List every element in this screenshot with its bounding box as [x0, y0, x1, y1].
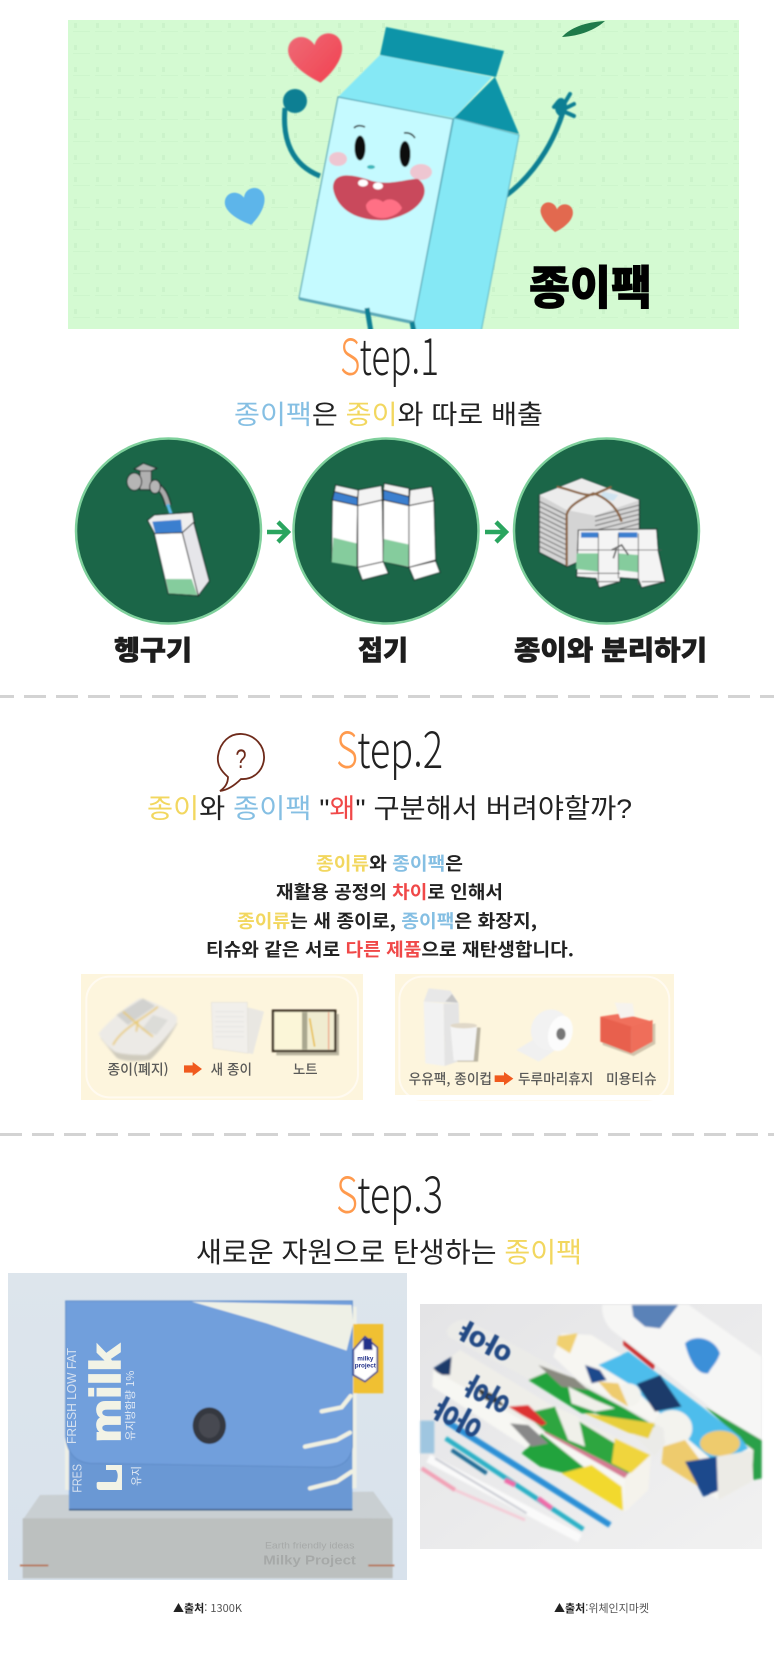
heading: step 3: Step.3 [336, 1156, 443, 1228]
wallet lettering: FRESH LOW FAT [65, 1348, 79, 1444]
wallet lettering: 유지방함량 1% [123, 1370, 138, 1441]
title: 종이팩: 종이팩 [529, 252, 652, 318]
wallet lettering: milk [82, 1344, 130, 1443]
text block: recycling explanation: 종이류와 종이팩은 [316, 850, 463, 876]
case lettering: 아야 [455, 1316, 517, 1366]
caption: source 1300K: ▲출처: 1300K [173, 1600, 243, 1616]
heading: why separate: 종이와 종이팩 "왜" 구분해서 버려야할까? [147, 794, 632, 824]
wallet lettering: milky [357, 1356, 374, 1363]
front case front wall [432, 1370, 625, 1512]
heading: step 2: Step.2 [336, 711, 443, 783]
middle case [553, 1333, 753, 1500]
panel: paper pack recycling [395, 974, 674, 1100]
label: 접기: 접기 [358, 629, 408, 668]
gray book base [20, 1492, 394, 1578]
icon: tissue box [600, 1003, 655, 1056]
embossed text: Earth friendly ideas [265, 1541, 355, 1551]
icon: folded carton [332, 483, 440, 580]
arrow [184, 1062, 202, 1076]
icon: blue heart [223, 186, 269, 229]
text block: recycling explanation: 종이류는 새 종이로, 종이팩은 화장지, [237, 908, 537, 934]
label: 종이(폐지): 종이(폐지) [107, 1060, 169, 1080]
caption: source Wechange market: ▲출처:위체인지마켓 [554, 1600, 649, 1616]
icon: notebook [273, 1011, 339, 1055]
wallet lettering: 유지 [129, 1466, 144, 1486]
arrow [495, 1072, 513, 1085]
photo: milk carton wallet [8, 1273, 407, 1580]
icon: question speech bubble [218, 734, 264, 791]
icon: milk carton character [283, 27, 574, 332]
heading: paper pack goes separately from paper: 종이팩은 종이와 따로 배출 [234, 400, 543, 430]
panel: rinse circle [76, 438, 261, 624]
icon: toilet paper roll [516, 1004, 577, 1062]
icon: leaf [562, 21, 605, 37]
front case lid [447, 1320, 665, 1457]
case lettering: 아야 [461, 1369, 516, 1418]
icon: red heart [287, 32, 346, 86]
photo: milk carton wallet: Milky Project [263, 1553, 357, 1568]
panel: paper recycling [81, 974, 363, 1100]
heading: reborn as new resource: 새로운 자원으로 탄생하는 종이팩 [196, 1237, 582, 1268]
icon: milk carton and cup [424, 988, 481, 1066]
icon: new paper stack [211, 1002, 264, 1054]
icon: faucet and carton [127, 463, 209, 596]
label: 종이와 분리하기: 종이와 분리하기 [514, 629, 707, 668]
arrow [267, 522, 288, 542]
rear case [602, 1305, 762, 1440]
case lettering [430, 1316, 517, 1442]
text block: recycling explanation: 재활용 공정의 차이로 인해서 [276, 878, 503, 904]
label: 헹구기: 헹구기 [114, 629, 192, 668]
text block: recycling explanation [206, 850, 574, 962]
label: 두루마리휴지: 두루마리휴지 [518, 1069, 593, 1089]
label: 새 종이: 새 종이 [211, 1060, 252, 1080]
icon: question speech bubble: ? [236, 744, 246, 774]
label: 노트: 노트 [293, 1060, 318, 1080]
wallet lettering: project [355, 1362, 377, 1369]
case lettering: 아야 [430, 1390, 489, 1442]
panel: hero banner [68, 20, 739, 332]
panel: fold circle [294, 438, 478, 624]
icon: orange heart [538, 201, 574, 234]
wallet body [65, 1301, 383, 1510]
front case back wall [433, 1350, 651, 1478]
icon: newspaper bundle and cartons [539, 478, 665, 588]
panel: separate circle [514, 438, 699, 624]
label: 우유팩, 종이컵: 우유팩, 종이컵 [409, 1069, 492, 1089]
text block: recycling explanation: 티슈와 같은 서로 다른 제품 으로 재탄생합니다. [206, 936, 574, 962]
pens [428, 1458, 580, 1538]
arrow [485, 522, 506, 542]
label: 미용티슈: 미용티슈 [606, 1069, 657, 1089]
icon: newspaper bundle [99, 998, 177, 1061]
wallet lettering: FRES [70, 1464, 84, 1493]
wallet lettering [65, 1344, 377, 1493]
heading: step 1: Step.1 [340, 318, 439, 390]
photo: milk carton pencil cases [420, 1304, 762, 1549]
